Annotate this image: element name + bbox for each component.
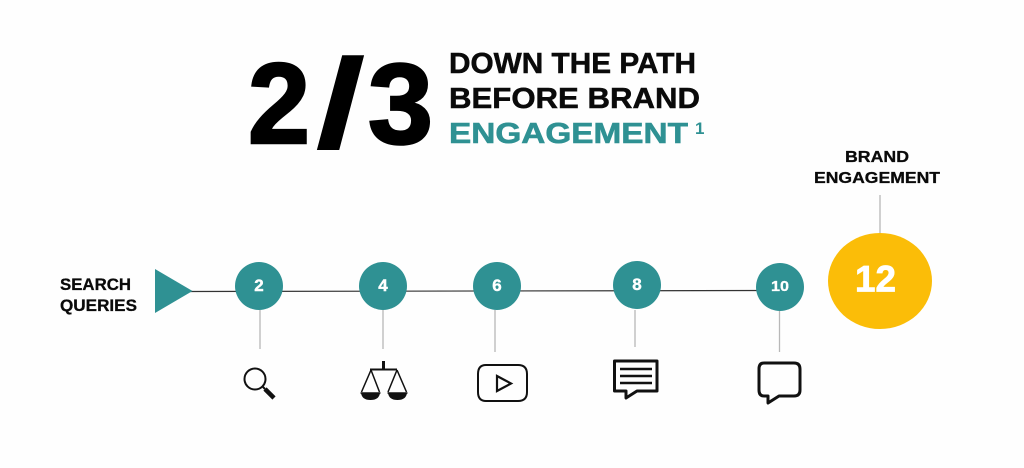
arrow: start triangle: [155, 269, 192, 313]
step 8: 8: [632, 275, 642, 294]
heading: down the path before brand engagement: BEFORE BRAND: [449, 83, 700, 115]
step 2: 2: [254, 276, 264, 295]
icon: balance scale: [360, 361, 408, 400]
step 6: [473, 262, 521, 310]
step 12: brand engagement circle: [828, 233, 932, 329]
icon: video play: [478, 365, 527, 401]
title: 2/3 statistic: 3: [368, 41, 433, 168]
heading: down the path before brand engagement: [449, 48, 704, 150]
icon: speech bubble: [759, 363, 800, 403]
label: search queries: SEARCH: [60, 275, 131, 294]
heading: down the path before brand engagement: 1: [695, 119, 704, 138]
connector lines: [260, 195, 880, 352]
step 4: 4: [378, 276, 388, 295]
step 4: [359, 262, 407, 310]
title: 2/3 statistic: [248, 33, 433, 174]
heading: down the path before brand engagement: DOWN THE PATH: [449, 48, 696, 80]
step 10: [756, 263, 804, 311]
step 8: [613, 261, 661, 309]
step 10: 10: [771, 278, 789, 295]
label: brand engagement: ENGAGEMENT: [814, 170, 940, 187]
title: 2/3 statistic: 2: [248, 41, 310, 168]
step 2: [235, 262, 283, 310]
step 6: 6: [492, 276, 502, 295]
icon: magnifying glass: [244, 368, 274, 398]
label: search queries: [60, 275, 137, 315]
timeline line: [190, 290, 780, 292]
label: brand engagement: [814, 149, 940, 187]
label: brand engagement: BRAND: [845, 149, 909, 166]
label: search queries: QUERIES: [60, 296, 137, 315]
title: 2/3 statistic: /: [316, 33, 365, 174]
icon: message with text lines: [614, 361, 657, 398]
heading: down the path before brand engagement: ENGAGEMENT: [449, 118, 688, 150]
step 12: brand engagement circle: 12: [855, 258, 896, 300]
